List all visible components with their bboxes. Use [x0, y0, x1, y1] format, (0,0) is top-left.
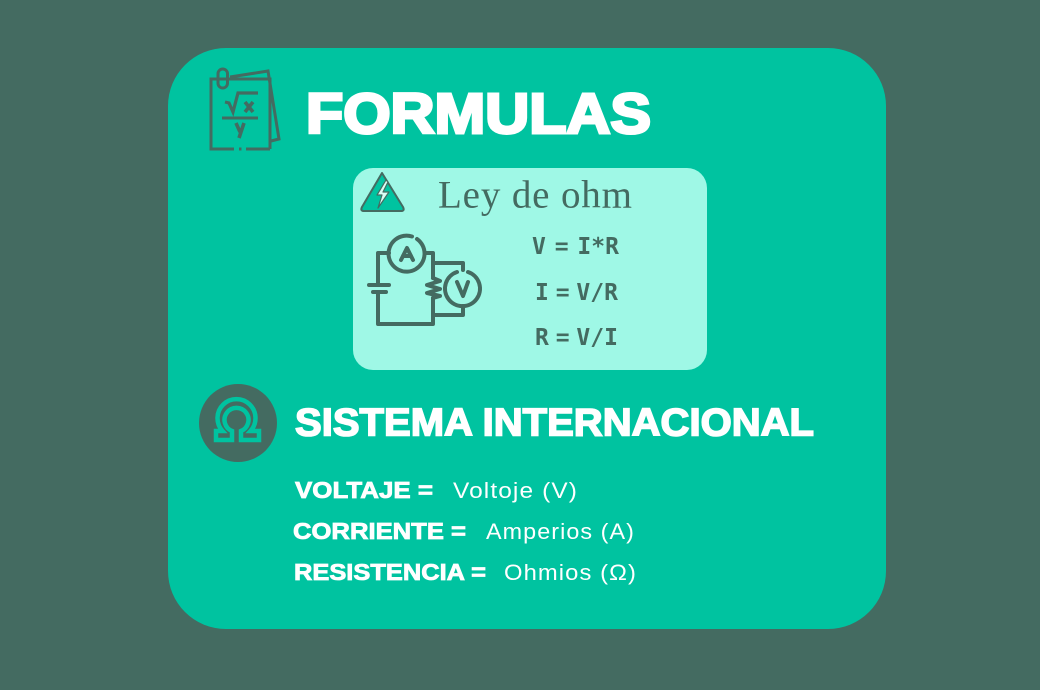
label: CORRIENTE: CORRIENTE =	[293, 518, 466, 544]
icon: high voltage triangle	[361, 173, 404, 211]
formula: I = V/R: I = V/R	[535, 280, 618, 306]
panel: main card	[168, 48, 886, 629]
formula: V = I*R: V = I*R	[532, 234, 619, 260]
icon: omega badge	[199, 384, 277, 462]
heading: Ley de ohm: Ley de ohm	[438, 174, 632, 216]
icon: formula notepad	[211, 69, 279, 149]
value: Voltoje (V): Voltoje (V)	[453, 478, 578, 503]
list: units	[293, 477, 637, 585]
formula: R = V/I: R = V/I	[535, 325, 618, 351]
icon: circuit diagram	[369, 236, 480, 324]
value: Amperios (A): Amperios (A)	[486, 519, 635, 544]
label: VOLTAJE: VOLTAJE =	[295, 477, 433, 503]
title: FORMULAS: FORMULAS	[306, 82, 651, 146]
panel: Ley de ohm	[353, 168, 707, 370]
heading: SISTEMA INTERNACIONAL: SISTEMA INTERNACIONAL	[295, 402, 814, 444]
label: RESISTENCIA: RESISTENCIA =	[294, 559, 486, 585]
value: Ohmios (Ω): Ohmios (Ω)	[504, 560, 637, 585]
